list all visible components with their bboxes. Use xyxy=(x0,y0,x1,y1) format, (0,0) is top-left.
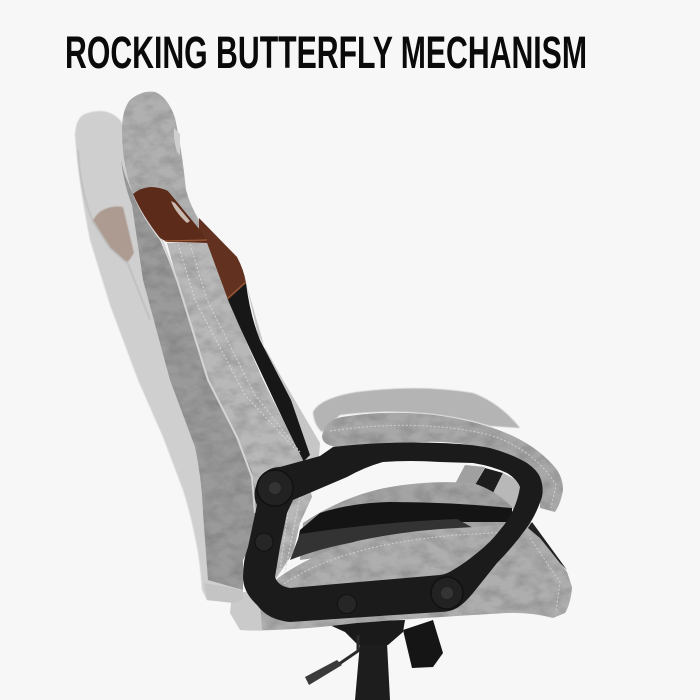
ghost seam xyxy=(78,150,150,320)
black armrest frame xyxy=(243,442,543,622)
light seam piping xyxy=(134,195,255,513)
screw cap: side xyxy=(255,533,273,551)
mechanism plate xyxy=(323,620,405,645)
rear black spine panel xyxy=(227,283,310,462)
ghost strut right xyxy=(492,473,522,510)
gas lift cylinder xyxy=(355,642,390,700)
pivot bolt: shoulder xyxy=(257,470,293,506)
seat rear ghost underside xyxy=(230,590,300,631)
rear brown leather panel xyxy=(199,218,246,300)
side outer panel xyxy=(121,160,258,590)
seat front black gap xyxy=(528,522,567,570)
brown logo xyxy=(171,201,190,223)
armrest stitching xyxy=(330,425,556,508)
front brown leather panel xyxy=(133,187,208,243)
seat stitching xyxy=(284,532,560,612)
tilt knob xyxy=(403,620,443,668)
main armrest pad xyxy=(322,413,563,512)
pivot bolt: front lower xyxy=(431,577,463,609)
ghost strut xyxy=(455,465,485,490)
headrest upper panel xyxy=(122,92,199,232)
screw cap: bottom xyxy=(338,594,356,614)
embroidered logo xyxy=(174,128,180,155)
black strut xyxy=(472,468,503,495)
ghost brown panel xyxy=(93,206,134,262)
ghost backrest: reclined position xyxy=(75,111,240,602)
rear struts behind armrest xyxy=(455,465,522,510)
stitching xyxy=(178,244,300,572)
seat base and mechanism xyxy=(305,620,443,700)
lever paddle xyxy=(305,660,342,685)
seat cushion xyxy=(230,482,572,631)
backrest bottom flap xyxy=(204,583,243,603)
ghost armrest xyxy=(313,388,520,432)
outer light strip xyxy=(246,283,320,470)
seat main body xyxy=(260,522,572,630)
side front panel xyxy=(167,243,312,580)
brown stitched edge xyxy=(165,240,246,298)
height lever xyxy=(339,635,358,664)
main backrest xyxy=(121,92,320,603)
seat mesh band xyxy=(290,519,475,560)
seat rear cushion top xyxy=(300,482,512,560)
seat black band xyxy=(298,502,512,540)
